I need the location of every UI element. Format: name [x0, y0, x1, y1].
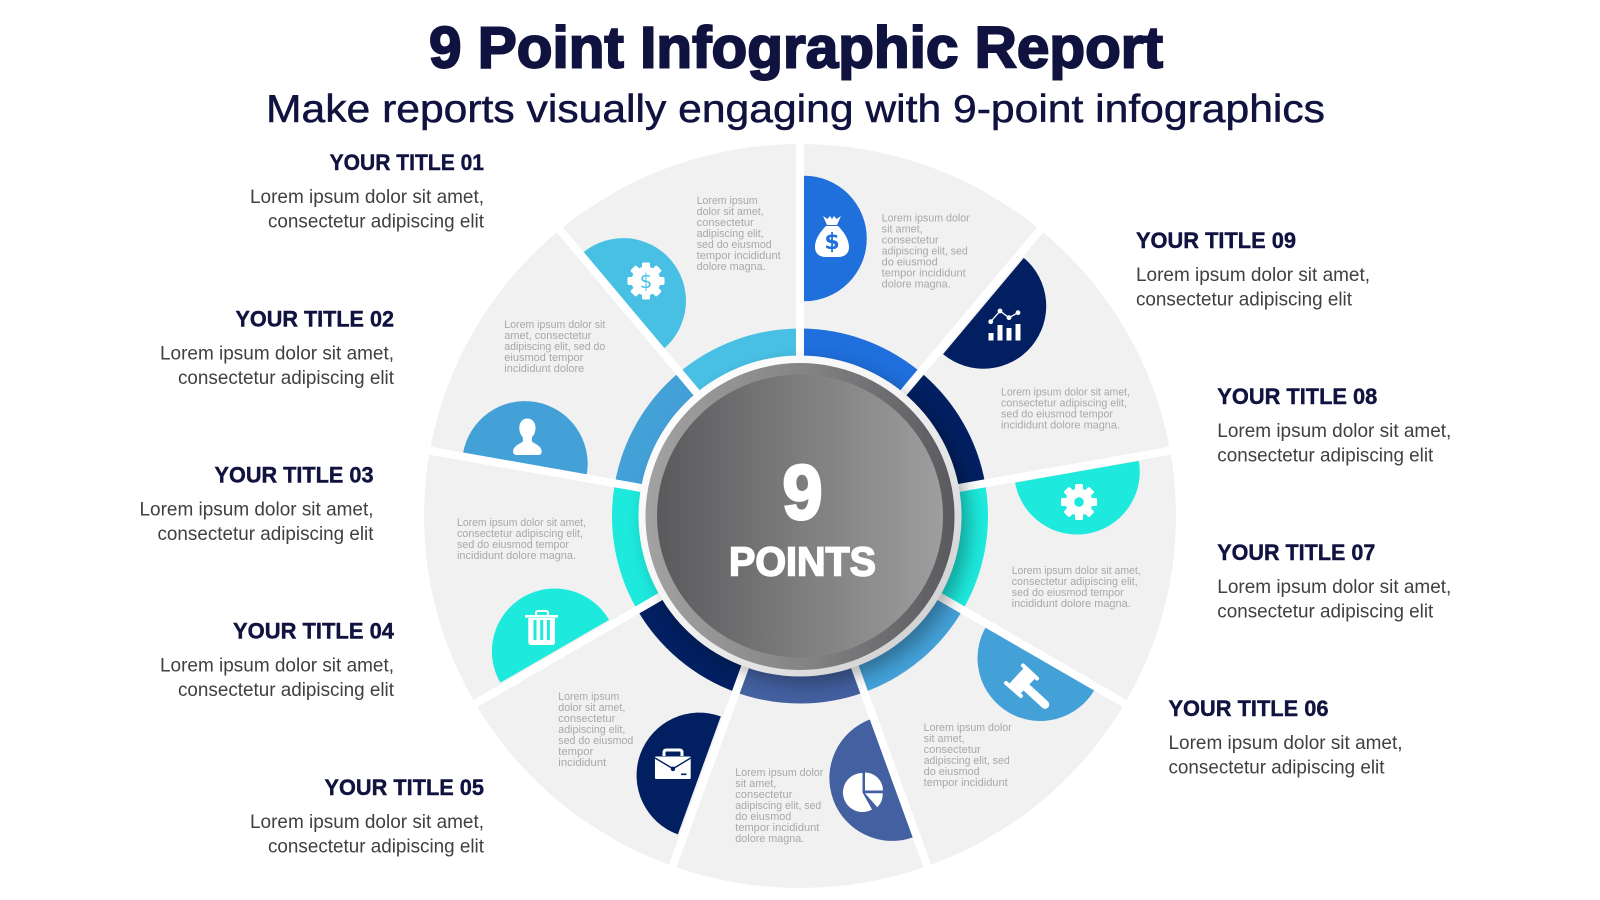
center number: 9 — [782, 450, 822, 536]
icon: money bag — [815, 216, 849, 257]
icon: gear with dollar: $ — [640, 269, 652, 293]
segment text: Lorem ipsum dolor sit amet, — [1012, 565, 1141, 577]
icon: briefcase — [655, 750, 691, 779]
segment text: consectetur — [924, 744, 981, 756]
segment text: dolore magna. — [697, 261, 766, 273]
segment text: adipiscing elit, sed — [735, 800, 821, 812]
segment text: sed do eiusmod tempor — [457, 539, 569, 551]
half circle — [463, 391, 598, 475]
wedge background — [800, 144, 1042, 516]
label: title 04: Lorem ipsum dolor sit amet, — [160, 655, 394, 677]
label: title 05 — [250, 775, 485, 857]
segment text: dolor sit amet, — [558, 702, 625, 714]
ring segment — [612, 483, 800, 610]
segment text: Lorem ipsum dolor — [735, 767, 824, 779]
ring segment — [800, 516, 963, 692]
center disc — [638, 356, 969, 684]
label: title 09 — [1136, 228, 1370, 310]
segment text: tempor incididunt — [924, 777, 1008, 789]
segment text — [457, 517, 586, 562]
panel: segment 03 teal — [424, 451, 800, 702]
segment text: sed do eiusmod tempor — [1012, 587, 1124, 599]
panel: segment 05 indigo — [671, 516, 929, 888]
ring segment — [800, 328, 921, 516]
label: title 02: Lorem ipsum dolor sit amet, — [160, 342, 394, 364]
label: title 02 — [160, 306, 395, 389]
segment text: consectetur — [558, 713, 616, 725]
segment text: sed do eiusmod — [558, 735, 633, 747]
wedge background — [671, 516, 929, 888]
label: title 03: YOUR TITLE 03 — [214, 462, 374, 488]
icon: line and bar chart — [988, 309, 1020, 340]
segment text — [882, 212, 970, 290]
segment text: Lorem ipsum dolor sit — [504, 319, 605, 331]
label: title 05: consectetur adipiscing elit — [268, 835, 485, 857]
label: title 06: consectetur adipiscing elit — [1168, 756, 1385, 778]
segment text — [504, 319, 605, 375]
segment text — [735, 767, 824, 845]
segment text: sit amet, — [924, 733, 965, 745]
segment text: sed do eiusmod tempor — [1001, 408, 1113, 420]
segment text: incididunt dolore magna. — [457, 550, 576, 562]
label: title 06 — [1168, 696, 1402, 778]
segment text: consectetur adipiscing elit, — [1012, 576, 1138, 588]
segment text: do eiusmod — [735, 811, 791, 823]
segment text: incididunt dolore magna. — [1012, 598, 1131, 610]
ring segment — [637, 516, 800, 692]
label: title 09: Lorem ipsum dolor sit amet, — [1136, 264, 1370, 286]
segment text: adipiscing elit, — [558, 724, 625, 736]
panel: segment 09 blue — [800, 144, 1042, 516]
wedge background — [800, 231, 1170, 516]
half circle — [943, 258, 1072, 394]
segment text: eiusmod tempor — [504, 352, 584, 364]
label: title 04: consectetur adipiscing elit — [178, 679, 395, 701]
half circle — [619, 695, 721, 834]
wedge background — [800, 451, 1176, 702]
segment text: Lorem ipsum — [697, 195, 758, 207]
segment text: dolor sit amet, — [697, 206, 764, 218]
segment text: dolore magna. — [735, 833, 804, 845]
title: 9 Point Infographic Report — [429, 16, 1163, 80]
ring segment — [615, 372, 800, 516]
wedge background — [558, 144, 800, 516]
icon: gavel — [1006, 666, 1045, 704]
segment text: do eiusmod — [924, 766, 980, 778]
segment text: Lorem ipsum dolor sit amet, — [457, 517, 586, 529]
panel: segment 01 sky blue — [558, 144, 800, 516]
segment text — [1001, 386, 1130, 431]
segment text: incididunt — [558, 757, 606, 769]
segment text: dolore magna. — [882, 278, 951, 290]
half circle — [469, 566, 609, 683]
wedge background — [474, 516, 800, 866]
label: title 02: consectetur adipiscing elit — [178, 367, 395, 389]
segment text: consectetur — [735, 789, 793, 801]
panel: segment 04 navy — [474, 516, 800, 866]
wedge background — [430, 231, 800, 516]
label: title 07: consectetur adipiscing elit — [1217, 600, 1434, 622]
label: title 08 — [1217, 384, 1451, 466]
label: title 01: Lorem ipsum dolor sit amet, — [250, 186, 484, 208]
segment text: incididunt dolore magna. — [1001, 419, 1120, 431]
icon: money bag: $ — [824, 230, 840, 255]
segment text: tempor incididunt — [735, 822, 819, 834]
panel: segment 06 steel blue — [800, 516, 1126, 866]
label: title 03: Lorem ipsum dolor sit amet, — [140, 498, 374, 520]
icon: person — [513, 418, 542, 455]
ring segment — [800, 372, 985, 516]
half circle — [1015, 461, 1150, 544]
segment text: Lorem ipsum — [558, 691, 619, 703]
half circle — [804, 176, 867, 301]
label: title 01: YOUR TITLE 01 — [330, 150, 484, 175]
half circle — [812, 719, 914, 859]
segment text: sed do eiusmod — [697, 239, 772, 251]
segment text: tempor — [558, 746, 594, 758]
segment text: sit amet, — [735, 778, 776, 790]
subtitle: Make reports visually engaging with 9-point infographics — [266, 88, 1325, 131]
label: title 03: consectetur adipiscing elit — [158, 523, 374, 545]
label: title 02: YOUR TITLE 02 — [236, 306, 394, 331]
center label: POINTS — [729, 538, 876, 584]
segment text: consectetur adipiscing elit, — [1001, 397, 1127, 409]
label: title 04 — [160, 619, 395, 701]
segment text: Lorem ipsum dolor — [882, 212, 970, 224]
segment text: incididunt dolore — [504, 363, 584, 375]
label: title 01: consectetur adipiscing elit — [268, 210, 485, 232]
segment text: adipiscing elit, — [697, 228, 764, 240]
ring segment — [800, 483, 988, 610]
label: title 04: YOUR TITLE 04 — [233, 619, 395, 644]
segment text: do eiusmod — [882, 256, 938, 268]
segment text: consectetur — [882, 234, 939, 246]
label: title 09: consectetur adipiscing elit — [1136, 288, 1353, 310]
label: title 05: Lorem ipsum dolor sit amet, — [250, 811, 484, 833]
segment text — [558, 691, 633, 769]
segment text — [924, 722, 1012, 789]
segment text: sit amet, — [882, 223, 923, 235]
label: title 07: Lorem ipsum dolor sit amet, — [1217, 576, 1451, 598]
segment text: consectetur adipiscing elit, — [457, 528, 583, 540]
icon: gear — [1061, 484, 1097, 520]
label: title 07 — [1217, 540, 1451, 622]
segment text: amet, consectetur — [504, 330, 592, 342]
icon: gear with dollar — [628, 262, 664, 300]
segment text: adipiscing elit, sed do — [504, 341, 605, 353]
segment text: tempor incididunt — [697, 250, 781, 262]
half circle — [955, 627, 1095, 744]
ring segment — [679, 328, 800, 516]
label: title 01 — [250, 150, 485, 232]
label: title 03 — [140, 462, 374, 545]
segment text: consectetur — [697, 217, 754, 229]
panel: segment 07 teal — [800, 451, 1176, 702]
segment text: Lorem ipsum dolor — [924, 722, 1012, 734]
label: title 08: YOUR TITLE 08 — [1217, 384, 1377, 409]
panel: segment 08 navy — [800, 231, 1170, 516]
ring segment — [736, 516, 864, 704]
icon: trash can — [525, 611, 558, 645]
half circle — [583, 212, 712, 349]
segment text: tempor incididunt — [882, 267, 966, 279]
label: title 09: YOUR TITLE 09 — [1136, 228, 1296, 253]
segment text — [697, 195, 781, 273]
segment text: Lorem ipsum dolor sit amet, — [1001, 386, 1130, 398]
segment text: adipiscing elit, sed — [924, 755, 1010, 767]
wedge background — [800, 516, 1126, 866]
segment text: adipiscing elit, sed — [882, 245, 968, 257]
label: title 06: Lorem ipsum dolor sit amet, — [1168, 732, 1402, 754]
label: title 08: consectetur adipiscing elit — [1217, 444, 1434, 466]
wedge background — [424, 451, 800, 702]
label: title 08: Lorem ipsum dolor sit amet, — [1217, 420, 1451, 442]
segment text — [1012, 565, 1141, 610]
label: title 07: YOUR TITLE 07 — [1217, 540, 1375, 565]
panel: segment 02 steel blue — [430, 231, 800, 516]
label: title 06: YOUR TITLE 06 — [1168, 696, 1328, 721]
icon: pie chart — [843, 772, 883, 812]
label: title 05: YOUR TITLE 05 — [324, 775, 484, 800]
